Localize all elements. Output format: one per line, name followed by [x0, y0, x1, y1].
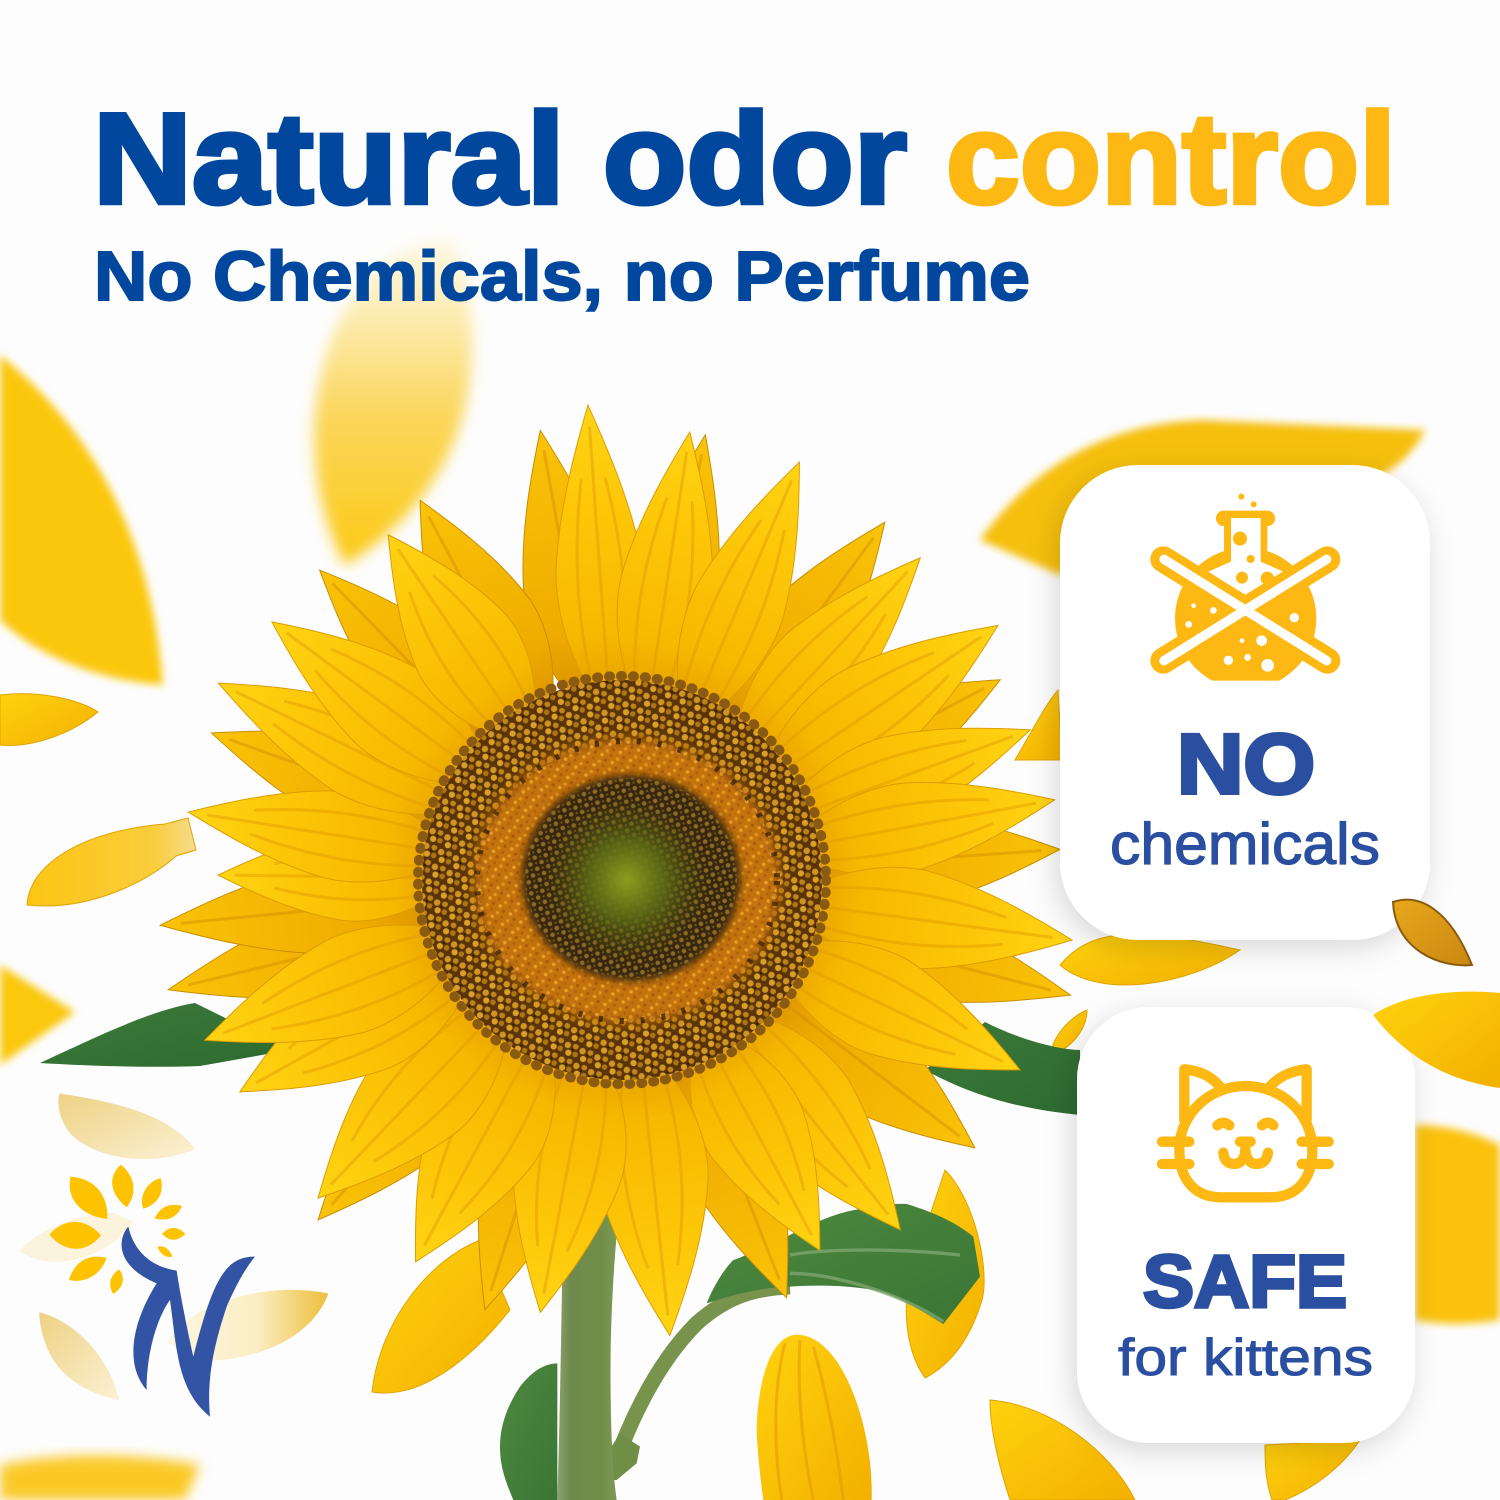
logo	[19, 1093, 328, 1417]
sharp loose petals	[0, 690, 1360, 1500]
panel: safe for kittens	[1077, 1007, 1415, 1443]
front petal ring	[181, 402, 1079, 1341]
plant: stem, branch and leaves	[500, 1200, 980, 1500]
back petal ring	[156, 422, 1082, 1325]
sunflower seed disc	[418, 676, 826, 1084]
title: control	[946, 87, 1396, 231]
subtitle: No Chemicals, no Perfume	[94, 237, 1030, 315]
sunflower petals	[156, 402, 1082, 1341]
right leaf	[925, 1022, 1080, 1115]
lower leaf	[500, 1363, 557, 1500]
N monogram	[122, 1227, 255, 1417]
sunburst leaves	[49, 1165, 185, 1294]
upper leaf	[707, 1204, 980, 1324]
right edge petal	[1373, 992, 1500, 1088]
pale petals	[19, 1093, 328, 1400]
bottom standing petal	[757, 1335, 872, 1500]
left leaf	[40, 1003, 290, 1067]
label: SAFE: SAFE	[1143, 1240, 1347, 1323]
label: for kittens: for kittens	[1118, 1329, 1373, 1387]
seed	[1393, 900, 1472, 965]
panel: no chemicals	[1060, 465, 1430, 940]
branch	[615, 1287, 790, 1463]
stem	[557, 1200, 620, 1500]
title: Natural odor	[93, 87, 907, 231]
label: chemicals: chemicals	[1110, 812, 1380, 877]
icon: crossed-out flask	[1163, 494, 1327, 689]
title	[93, 87, 1396, 231]
label: NO: NO	[1177, 717, 1315, 811]
icon: cat face	[1162, 1069, 1329, 1197]
large side leaves	[40, 1003, 1080, 1115]
